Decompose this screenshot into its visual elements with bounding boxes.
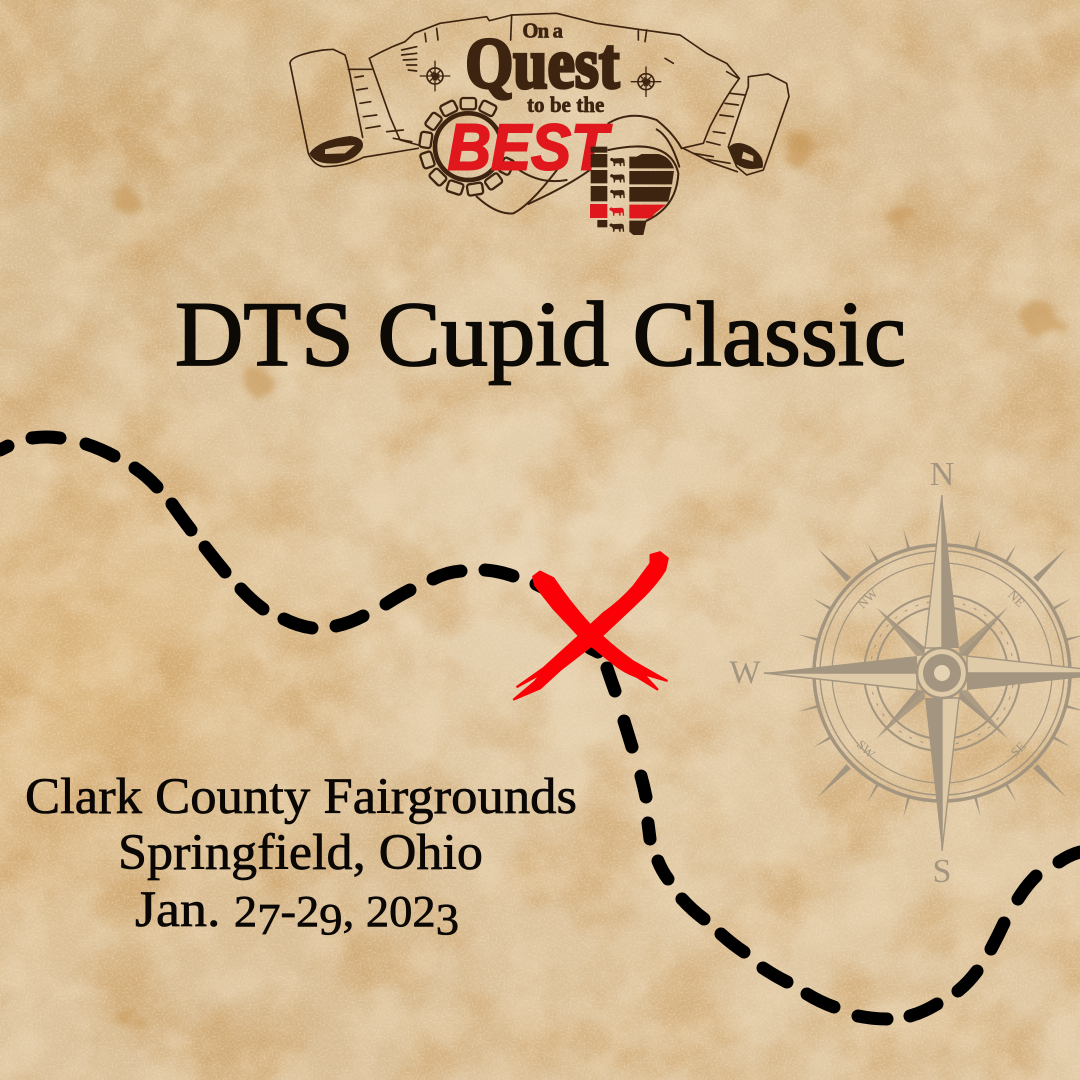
event details: Jan. 2 bbox=[135, 882, 256, 938]
event details: - bbox=[281, 887, 296, 936]
logo ribbon and swoosh bbox=[477, 116, 682, 221]
title: DTS Cupid Classic bbox=[175, 283, 906, 385]
compass star points bbox=[764, 495, 1080, 851]
dashed treasure path bbox=[0, 437, 1080, 1019]
compass hub bbox=[917, 648, 967, 698]
BEST wordmark: BEST bbox=[448, 110, 612, 183]
ship wheels bbox=[420, 61, 661, 97]
compass labels: N bbox=[930, 456, 954, 493]
event details: 7 bbox=[257, 895, 281, 944]
compass labels: S bbox=[933, 853, 951, 890]
event details: Clark County Fairgrounds bbox=[25, 769, 577, 825]
logo: On a Quest to be the Best bbox=[290, 13, 789, 235]
compass labels: NE bbox=[1005, 587, 1028, 610]
compass ticks bbox=[798, 529, 1080, 817]
event details bbox=[25, 769, 577, 944]
compass labels: W bbox=[729, 655, 761, 691]
gear ring bbox=[419, 98, 515, 196]
compass labels: NW bbox=[854, 585, 881, 611]
logo words: On a bbox=[522, 21, 564, 43]
scroll banner bbox=[290, 13, 789, 175]
scroll curl shadows bbox=[309, 136, 763, 169]
Ohio cattle mark bbox=[590, 147, 674, 235]
logo words: to be the bbox=[527, 92, 604, 117]
event details: 3 bbox=[436, 895, 459, 944]
event details: 2 bbox=[234, 887, 459, 944]
event details: , bbox=[343, 887, 366, 936]
event details: 9 bbox=[319, 895, 343, 944]
compass labels: SE bbox=[1007, 738, 1029, 760]
red X mark bbox=[514, 552, 668, 699]
compass rose bbox=[729, 456, 1080, 890]
compass labels: SW bbox=[854, 737, 879, 762]
event details: 202 bbox=[234, 887, 459, 944]
event details: Springfield, Ohio bbox=[118, 825, 483, 881]
compass rings bbox=[814, 545, 1070, 801]
logo words: Quest bbox=[465, 23, 619, 103]
compass labels bbox=[729, 456, 1029, 890]
